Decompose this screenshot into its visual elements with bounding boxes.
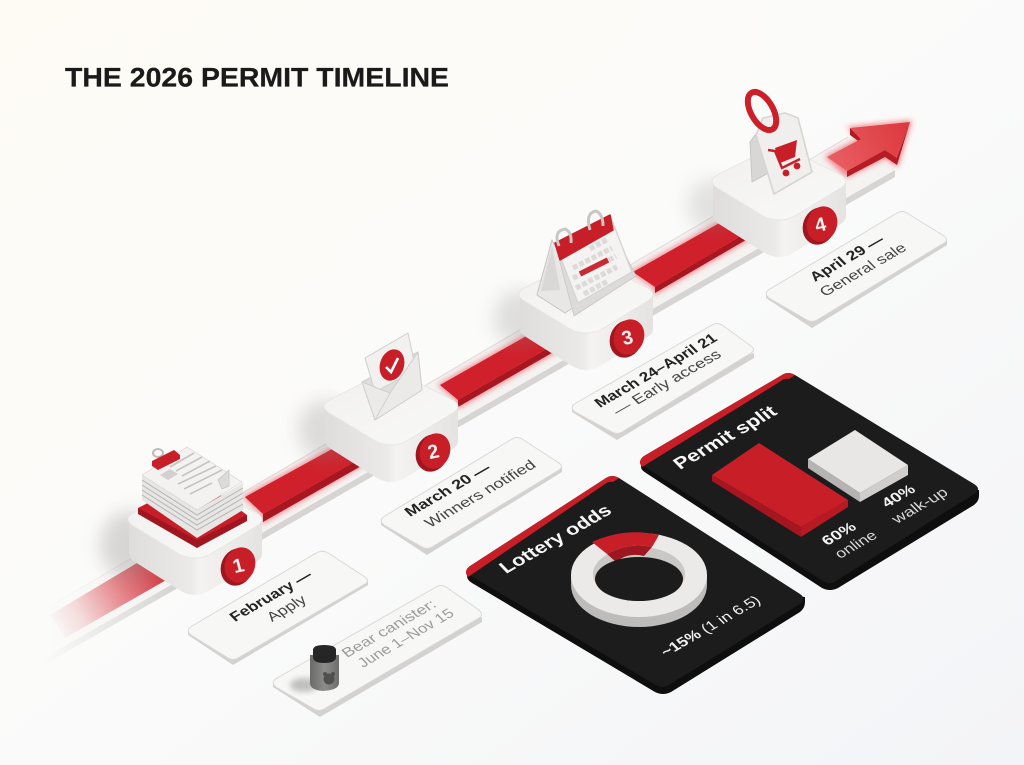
label: bear canister: Bear canister: [339, 597, 440, 661]
label: February: Apply [264, 593, 310, 625]
step badge 4: 4 [812, 213, 829, 237]
label: March 20: Winners notified [422, 458, 540, 531]
panel: permit split [640, 373, 979, 590]
panel: lottery odds: ~15% (1 in 6.5) [658, 593, 764, 660]
step badge 3: 3 [619, 326, 636, 350]
step badge 1: 1 [230, 554, 247, 578]
icon: cart [768, 140, 800, 176]
icon: envelope with check [362, 333, 422, 420]
label: April 29 [766, 212, 947, 328]
panel title: Lottery odds [495, 501, 616, 577]
track segment: lead-in [50, 557, 168, 638]
label: February [188, 551, 368, 665]
step 3 node [494, 211, 653, 370]
value: 40% walk-up: 40% [879, 482, 919, 511]
icon: check badge [376, 346, 408, 384]
step 1 node [100, 447, 262, 595]
step badge 2: 2 [425, 440, 442, 464]
value: 40% walk-up: walk-up [888, 485, 952, 527]
icon: clip [152, 449, 180, 470]
track segment: 3 to 4 [633, 217, 751, 293]
step 4 node [688, 87, 846, 257]
value: 60% online: 60% [819, 520, 860, 549]
icon: paper stack [138, 447, 247, 548]
title: THE 2026 PERMIT TIMELINE [65, 62, 449, 92]
label: April 29: General sale [817, 241, 910, 300]
label: March 24 to April 21: — Early access [610, 347, 725, 419]
step badge 2 [410, 429, 455, 476]
step badge 4 [797, 202, 842, 249]
track segment: 2 to 3 [440, 330, 557, 407]
label: March 20 [381, 438, 562, 555]
step 2 node [298, 333, 458, 482]
label: bear canister: June 1–Nov 15 [355, 606, 458, 671]
label: March 24 to April 21: March 24–April 21 [592, 331, 721, 411]
panel: lottery odds [466, 476, 805, 694]
value: 60% online: online [832, 528, 881, 562]
bar: online 60% [712, 443, 848, 537]
icon: calendar [537, 211, 636, 316]
icon: price tag with cart [742, 87, 812, 194]
panel title: Permit split [669, 402, 782, 473]
label: bear canister [273, 586, 482, 717]
label: February: February — [227, 568, 316, 625]
timeline track [40, 137, 895, 667]
arrow [827, 122, 910, 177]
donut chart [571, 532, 707, 627]
value: 60% online [819, 520, 881, 562]
step badge 3 [604, 315, 649, 362]
bar: walk-up 40% [808, 430, 908, 502]
label: March 20: March 20 — [402, 461, 494, 520]
icon: bear canister [290, 645, 339, 692]
label: April 29: April 29 — [807, 233, 888, 285]
step badge 1 [215, 543, 260, 590]
label: March 24 to April 21 [572, 324, 754, 440]
track segment: 1 to 2 [245, 443, 363, 522]
